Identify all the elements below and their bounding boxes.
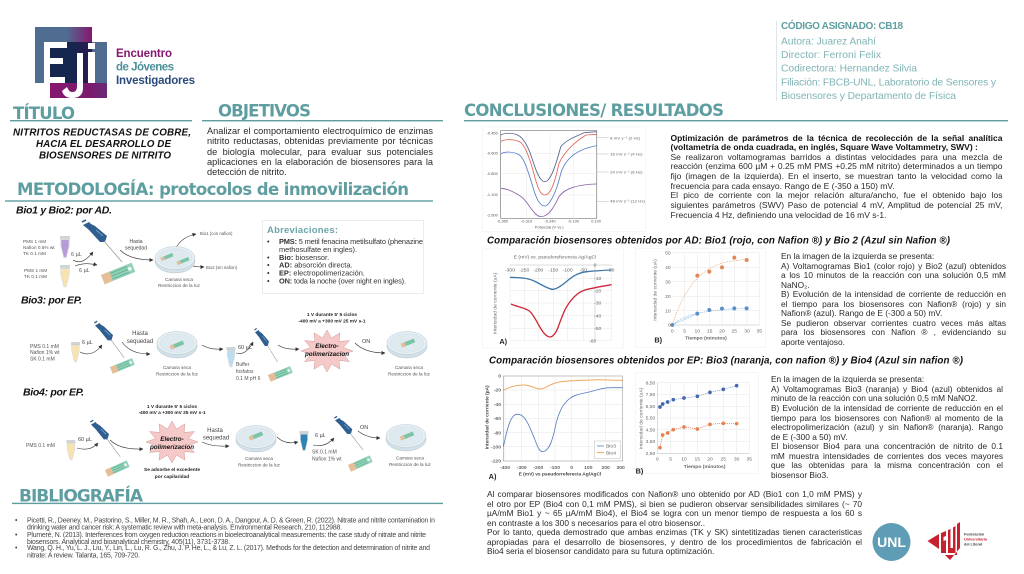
chart: SWV voltammograms at several speeds: -0.350 xyxy=(497,220,508,224)
heading: comparación EP: Comparación biosensores obtenidos por EP: Bio3 (naranja, con nafion ®) y Bio4 (Azul sin nafion ®) xyxy=(489,356,963,366)
volume label: 60 µL xyxy=(78,437,92,443)
electrode strip xyxy=(101,263,135,284)
labels: 6 µL xyxy=(315,433,326,439)
petri dish xyxy=(157,332,197,358)
chart A: voltammograms Bio3 Bio4: -20 xyxy=(494,388,501,394)
tubes xyxy=(60,236,70,287)
tube yellow xyxy=(66,440,76,460)
reagent label: PMS 0.1 mM xyxy=(26,443,55,449)
chart A: voltammograms Bio3 Bio4: Bio3 xyxy=(606,444,616,450)
conditions: 1 V durante 5' 5 ciclos xyxy=(147,404,197,410)
abbreviations list: • xyxy=(267,253,270,262)
logo: UNL: UNL xyxy=(877,534,906,550)
arrows xyxy=(77,431,380,449)
chart B: current over time Bio1 Bio2: 0 xyxy=(671,328,674,334)
chart B: current over time Bio3 Bio4: 6,50 xyxy=(646,404,656,410)
volume labels: 6 µL xyxy=(79,268,90,274)
logo mark EJI xyxy=(35,27,107,98)
chamber label: Camara seca xyxy=(163,365,191,370)
chart B: current over time Bio3 Bio4: 35 xyxy=(747,457,752,463)
chart A: voltammograms Bio1 Bio2: -300 xyxy=(505,267,515,273)
chamber label: Restriccion de la luz xyxy=(158,283,201,288)
first pipette and strip xyxy=(94,321,135,374)
logo: Encuentro de Jóvenes Investigadores xyxy=(35,27,195,98)
drying label: Hasta xyxy=(132,331,148,337)
chamber label: Restriccion de la luz xyxy=(389,462,432,467)
chart A: voltammograms Bio3 Bio4: 0 xyxy=(570,465,573,471)
chart B: current over time Bio1 Bio2: B) xyxy=(654,335,663,344)
chart B: current over time Bio1 Bio2: 20 xyxy=(665,294,671,300)
assigned code and authors: CÓDIGO ASIGNADO: CB18 xyxy=(781,19,903,32)
chart A: voltammograms Bio1 Bio2: E (mV) vs. pseudoreferencia Ag/AgCl xyxy=(514,254,596,260)
chart A: voltammograms Bio3 Bio4: 0 xyxy=(498,374,501,380)
labels: 0.1 M pH 6 xyxy=(236,376,261,382)
bibliography list: nitrate: A review. Talanta, 165, 709-720. xyxy=(27,552,140,559)
tube yellow xyxy=(71,342,80,362)
chart B: current over time Bio1 Bio2: 10 xyxy=(695,328,700,334)
arrows xyxy=(80,342,385,354)
chart A: voltammograms Bio1 Bio2: -50 xyxy=(594,326,601,332)
chart A: voltammograms Bio3 Bio4: E (mV) vs pseudorreferecia Ag/AgCl xyxy=(519,471,601,477)
chart: SWV voltammograms at several speeds xyxy=(482,127,646,232)
chart: SWV voltammograms at several speeds: -0.100 xyxy=(568,220,579,224)
chamber label: Camara seca xyxy=(396,456,424,460)
chart: SWV voltammograms at several speeds: 48 mV s⁻¹ (12 Hz) xyxy=(610,199,646,204)
objectives text: detección de nitrito. xyxy=(207,167,287,177)
chart B: current over time Bio1 Bio2: Tiempo (minutos) xyxy=(685,335,727,341)
reagent labels Bio3: PMS 0.1 mM xyxy=(30,344,59,350)
chart A: voltammograms Bio3 Bio4: -120 xyxy=(491,459,501,465)
electropolymerization conditions: 1 V durante 5' 5 ciclos xyxy=(307,312,357,318)
chart: SWV voltammograms at several speeds: -0.800 xyxy=(487,172,498,176)
electropolymerization conditions xyxy=(298,312,366,324)
star: electropolimerización: polimerizacion xyxy=(304,351,349,358)
bibliography list xyxy=(15,518,435,559)
chart B: current over time Bio3 Bio4: 3,50 xyxy=(646,439,656,445)
EP explanation text xyxy=(771,375,1003,480)
labels: fosfatos xyxy=(236,369,254,375)
chart B: current over time Bio3 Bio4: Tiempo (minutos) xyxy=(684,464,726,470)
bibliography list: Plumeré, N. (2013). Interferences from oxygen reduction reactions in bioelectroanalytical measurements: the case study of nitrate and nitrite xyxy=(27,532,426,539)
labels: SK 0.1 mM xyxy=(312,450,337,456)
chart A: voltammograms Bio3 Bio4: 200 xyxy=(601,465,610,471)
chart: SWV voltammograms at several speeds: -1.500 xyxy=(487,214,498,218)
logo wordmark: de Jóvenes xyxy=(116,62,174,74)
drying label: sequedad xyxy=(125,246,147,252)
logo wordmark: Encuentro xyxy=(116,48,172,60)
bibliography list: biosensors. Analytical and bioanalytical chemistry, 405(11), 3731-3738. xyxy=(27,539,230,546)
chart B: current over time Bio3 Bio4: 7,50 xyxy=(646,392,656,398)
capillarity note: por capilaridad xyxy=(155,474,189,480)
abbreviations list: • xyxy=(267,237,270,246)
subheading Bio3: Bio3: por EP. xyxy=(21,294,82,306)
reagent labels Bio1 Bio2: PMS 1 mM xyxy=(23,239,46,244)
chart A: voltammograms Bio3 Bio4: 100 xyxy=(584,465,593,471)
chart B: current over time Bio3 Bio4: 5 xyxy=(669,457,672,463)
chart A: voltammograms Bio1 Bio2: -10 xyxy=(594,276,601,282)
chart B: current over time Bio1 Bio2: 35 xyxy=(757,328,762,334)
chart B: current over time Bio1 Bio2: 25 xyxy=(732,328,737,334)
chart B: current over time Bio3 Bio4: 30 xyxy=(734,457,740,463)
assigned code and authors: Filiación: FBCB-UNL, Laboratorio de Sensores y xyxy=(781,78,997,88)
output labels xyxy=(200,231,238,270)
chart A: voltammograms Bio1 Bio2: -60 xyxy=(589,338,596,344)
chart A: voltammograms Bio3 Bio4: -200 xyxy=(533,465,544,471)
chart A: voltammograms Bio3 Bio4: -40 xyxy=(494,402,501,408)
volume labels xyxy=(71,252,90,274)
drying label: Hasta xyxy=(207,428,223,434)
assigned code and authors: Director: Ferroni Felix xyxy=(781,50,882,61)
assigned code and authors: Codirectora: Hernandez Silvia xyxy=(781,64,917,74)
chamber label: Camara seca xyxy=(395,365,423,370)
chart: SWV voltammograms at several speeds: -0.600 xyxy=(487,151,498,155)
capillarity note xyxy=(144,467,200,480)
title text: NITRITOS REDUCTASAS DE COBRE, xyxy=(13,128,191,138)
chart B: current over time Bio3 Bio4 xyxy=(636,372,758,476)
petri dish xyxy=(236,426,276,452)
chamber label: Camara seca xyxy=(245,456,273,461)
abbreviations list: AD: absorción directa. xyxy=(279,260,353,270)
chamber label xyxy=(389,456,432,467)
logo: Federación Universitaria del Litoral: Federación xyxy=(964,532,985,536)
conditions xyxy=(138,404,206,416)
abbreviations list: • xyxy=(267,268,270,278)
conclusions text xyxy=(487,490,862,556)
bibliography list: • xyxy=(15,518,18,524)
labels xyxy=(82,339,370,382)
chamber label: Restriccion de la luz xyxy=(156,372,199,376)
assigned code and authors: Autora: Juarez Anahí xyxy=(781,36,876,48)
chart B: current over time Bio3 Bio4: 8,50 xyxy=(646,380,656,386)
abbreviations heading: Abreviaciones: xyxy=(267,225,338,236)
chart A: voltammograms Bio1 Bio2: -250 xyxy=(519,267,530,273)
chart B: current over time Bio3 Bio4: 25 xyxy=(721,457,726,463)
drying label xyxy=(127,331,153,345)
drying label xyxy=(125,239,147,252)
chart: SWV voltammograms at several speeds: 0.100 xyxy=(591,220,601,224)
assigned code and authors xyxy=(776,19,997,102)
chart A: voltammograms Bio1 Bio2: -20 xyxy=(594,288,601,294)
objectives text: aplicaciones en la elaboración de biosensores para la xyxy=(207,157,433,167)
chart A: voltammograms Bio1 Bio2: -100 xyxy=(563,267,573,273)
chart A: voltammograms Bio3 Bio4: 300 xyxy=(616,465,625,471)
labels xyxy=(312,425,368,462)
chart B: current over time Bio3 Bio4: 0 xyxy=(656,457,659,463)
bibliography list: drinking water and cancer risk: A systematic review with meta-analysis. Environmental Research, 210, 112988. xyxy=(27,524,342,532)
chart: SWV voltammograms at several speeds: -0.240 xyxy=(544,220,556,224)
star: electropolimerización xyxy=(146,421,198,463)
output labels: Bio2 (sin nafion) xyxy=(206,265,238,270)
chart A: voltammograms Bio3 Bio4: -60 xyxy=(494,416,501,422)
chart B: current over time Bio3 Bio4: 4,50 xyxy=(646,427,656,433)
title text: BIOSENSORES DE NITRITO xyxy=(39,150,171,161)
capillarity note: Se adsorbe el excedente xyxy=(144,467,200,473)
title text: HACIA EL DESARROLLO DE xyxy=(36,139,171,150)
chart A: voltammograms Bio3 Bio4: Intensidad de corriente (µA) xyxy=(484,385,490,449)
arrows xyxy=(73,234,204,267)
volume labels: 6 µL xyxy=(71,252,82,258)
chart A: voltammograms Bio3 Bio4: -100 xyxy=(491,444,501,450)
buffer tube xyxy=(226,347,236,367)
chart: SWV voltammograms at several speeds: 24 mV s⁻¹ (8 Hz) xyxy=(610,169,643,174)
labels: ON xyxy=(362,339,370,345)
heading: comparación AD: Comparación biosensores obtenidos por AD: Bio1 (rojo, con Nafion ®) y Bio 2 (Azul sin Nafion ®) xyxy=(487,236,950,246)
labels: ON xyxy=(360,425,368,431)
chart B: current over time Bio3 Bio4: Intensidad de corriente (uA) xyxy=(639,387,645,449)
star: electropolimerización: polimerizacion xyxy=(149,444,194,451)
protocol Bio3 xyxy=(21,294,431,382)
chart B: current over time Bio1 Bio2: 15 xyxy=(707,328,713,334)
panel: abreviaciones xyxy=(262,220,424,294)
abbreviations list: • xyxy=(267,276,270,286)
chart B: current over time Bio1 Bio2: 40 xyxy=(665,265,671,271)
objectives text: de biología molecular, para evaluar sus potenciales xyxy=(207,147,433,157)
logo wordmark xyxy=(116,48,195,87)
bibliography list: • xyxy=(15,532,18,539)
chamber label: Restriccion de la luz xyxy=(238,462,281,468)
optimization text xyxy=(670,134,1003,220)
chart A: voltammograms Bio1 Bio2: -50 xyxy=(580,267,587,273)
chart A: voltammograms Bio1 Bio2: Intensidad de corriente (uA) xyxy=(492,272,498,334)
reagent labels Bio1 Bio2 xyxy=(23,239,55,279)
chart B: current over time Bio3 Bio4: 2,50 xyxy=(646,451,656,457)
chart A: voltammograms Bio1 Bio2: -200 xyxy=(533,267,544,273)
heading: metodología: METODOLOGÍA: protocolos de inmovilización xyxy=(17,180,409,199)
logo: UNL xyxy=(872,523,910,561)
drying label xyxy=(203,428,229,442)
chart: SWV voltammograms at several speeds: -0.310 xyxy=(521,220,532,224)
abbreviations list: methosulfate en ingles). xyxy=(279,245,357,254)
heading: título: TÍTULO xyxy=(13,104,75,123)
chart B: current over time Bio1 Bio2 xyxy=(635,248,765,347)
chart B: current over time Bio1 Bio2: 0 xyxy=(668,323,671,329)
chart B: current over time Bio3 Bio4: B) xyxy=(636,467,644,476)
pipette and strip xyxy=(90,420,130,477)
chart B: current over time Bio3 Bio4: 10 xyxy=(681,457,687,463)
star: electropolimerización: Electro- xyxy=(160,436,184,443)
chamber label xyxy=(388,365,431,376)
abbreviations list: EP: electropolimerización. xyxy=(279,268,365,278)
bibliography list: • xyxy=(15,545,18,552)
heading: bibliografía: BIBLIOGRAFÍA xyxy=(19,484,144,506)
bibliography list: Picetti, R., Deeney, M., Pastorino, S., Miller, M. R., Shah, A., Leon, D. A., Dangour, A. D. & Green, R. (2022). Nitrate and nitrite contamination in xyxy=(27,518,435,524)
labels: Buffer xyxy=(236,362,250,368)
chart A: voltammograms Bio3 Bio4 xyxy=(484,374,625,481)
star: electropolimerización xyxy=(301,330,353,372)
logo: Federación Universitaria del Litoral: Universitaria xyxy=(964,538,988,542)
protocol Bio4 xyxy=(23,386,432,480)
chart A: voltammograms Bio3 Bio4: -300 xyxy=(517,465,527,471)
chart B: current over time Bio1 Bio2: 20 xyxy=(719,328,725,334)
chart A: voltammograms Bio1 Bio2: -40 xyxy=(594,313,601,319)
conditions: -400 mV a +300 mV 25 mV s-1 xyxy=(138,410,206,416)
chart: SWV voltammograms at several speeds: Potencial (V vs.) xyxy=(535,226,564,230)
electropolymerization conditions: -400 mV a +300 mV 25 mV s-1 xyxy=(298,318,366,324)
labels: 6 µL xyxy=(82,340,93,346)
drying label: sequedad xyxy=(203,436,229,442)
heading: conclusiones: CONCLUSIONES/ RESULTADOS xyxy=(464,101,724,120)
protocol Bio1 y Bio2 xyxy=(16,204,238,288)
objectives text xyxy=(207,126,433,177)
star: electropolimerización: Electro- xyxy=(315,343,339,350)
petri dish xyxy=(155,246,195,273)
reagent labels Bio1 Bio2: TK 0.1 mM xyxy=(23,251,46,256)
chamber label xyxy=(156,365,199,376)
abbreviations list: ON: toda la noche (over night en ingles). xyxy=(279,276,406,286)
chart B: current over time Bio3 Bio4: 5,50 xyxy=(646,416,656,422)
chamber label xyxy=(158,277,201,288)
assigned code and authors: Biosensores y Departamento de Física xyxy=(781,91,956,102)
objectives text: nitrito reductasas, obtenidas previamente por técnicas xyxy=(207,136,433,146)
chart B: current over time Bio1 Bio2: 5 xyxy=(683,328,686,334)
chart: SWV voltammograms at several speeds: 8 mV s⁻¹ (2 Hz) xyxy=(610,135,641,140)
output labels: Bio1 (con nafion) xyxy=(200,231,233,236)
second pipette and strip xyxy=(254,328,293,382)
bibliography list: Wang, Q. H., Yu, L. J., Liu, Y., Lin, L., Lu, R. G., Zhu, J. P. He, L., & Lu, Z. L. (2017). Methods for the detection and determination of nitrite and xyxy=(27,545,430,552)
reagent labels Bio1 Bio2: TK 0.1 mM xyxy=(24,274,47,279)
chart A: voltammograms Bio3 Bio4: A) xyxy=(489,472,497,481)
final petri dish xyxy=(386,424,426,451)
chart A: voltammograms Bio1 Bio2: 50 xyxy=(609,267,615,273)
abbreviations list: Bio: biosensor. xyxy=(279,253,329,262)
chart B: current over time Bio3 Bio4: 15 xyxy=(695,457,700,463)
logo: Federación Universitaria del Litoral: del Litoral xyxy=(964,542,982,546)
chamber label xyxy=(238,456,281,468)
chart A: voltammograms Bio3 Bio4: Bio4 xyxy=(606,450,616,456)
blue tube xyxy=(300,431,308,451)
chart B: current over time Bio1 Bio2: Intensidad de corriente (uA) xyxy=(653,259,659,321)
chart A: voltammograms Bio1 Bio2: -30 xyxy=(594,301,601,307)
chart A: voltammograms Bio1 Bio2: -150 xyxy=(548,267,559,273)
logo wordmark: Investigadores xyxy=(116,75,195,87)
drying label: Hasta xyxy=(129,239,143,245)
second pipette and strip xyxy=(334,416,373,472)
objectives text: Analizar el comportamiento electroquímico de enzimas xyxy=(207,126,433,136)
reagent labels Bio1 Bio2: PMS 1 mM xyxy=(24,268,47,273)
chart A: voltammograms Bio3 Bio4: -400 xyxy=(500,465,510,471)
heading: objetivos: OBJETIVOS xyxy=(218,102,311,120)
reagent labels Bio3 xyxy=(30,344,60,362)
chart: SWV voltammograms at several speeds: 16 mV s⁻¹ (4 Hz) xyxy=(610,151,643,156)
labels: Nafion 1% wt xyxy=(312,456,342,462)
chart B: current over time Bio1 Bio2: 30 xyxy=(744,328,750,334)
subheading Bio1 y Bio2: Bio1 y Bio2: por AD. xyxy=(16,204,112,216)
AD explanation text xyxy=(781,252,1006,347)
reagent labels Bio3: SK 0.1 mM xyxy=(30,356,55,362)
title text xyxy=(13,128,191,161)
chart A: voltammograms Bio3 Bio4: -80 xyxy=(494,430,501,436)
chamber label: Camara seca xyxy=(165,277,193,282)
chamber label: Restriccion de la luz xyxy=(388,372,431,376)
labels: 60 µL xyxy=(238,345,252,351)
reagent labels Bio1 Bio2: Nafion 0.5% wt xyxy=(23,245,55,250)
chart A: voltammograms Bio1 Bio2: 0 xyxy=(594,263,597,269)
chart B: current over time Bio1 Bio2: 10 xyxy=(665,308,671,314)
pipette xyxy=(82,220,122,262)
subheading Bio4: Bio4: por EP. xyxy=(23,386,84,398)
abbreviations list xyxy=(267,237,423,286)
chart B: current over time Bio1 Bio2: 50 xyxy=(665,250,671,256)
reagent labels Bio3: Nafion 1% wt xyxy=(30,350,60,356)
abbreviations list: • xyxy=(267,260,270,270)
abbreviations list: PMS: 5 metil fenacina metilsulfato (phenazine xyxy=(279,237,423,246)
chart B: current over time Bio1 Bio2: 30 xyxy=(665,279,671,285)
chart: SWV voltammograms at several speeds: -1.100 xyxy=(487,193,498,197)
chart: SWV voltammograms at several speeds: -0.450 xyxy=(487,131,498,135)
logo: Federación Universitaria del Litoral xyxy=(928,522,988,560)
chart A: voltammograms Bio1 Bio2: A) xyxy=(499,337,508,346)
chart A: voltammograms Bio1 Bio2 xyxy=(483,249,623,348)
chart A: voltammograms Bio3 Bio4: -100 xyxy=(550,465,560,471)
drying label: sequedad xyxy=(127,339,153,345)
chart B: current over time Bio3 Bio4: 20 xyxy=(707,457,713,463)
final petri dish xyxy=(387,332,427,358)
